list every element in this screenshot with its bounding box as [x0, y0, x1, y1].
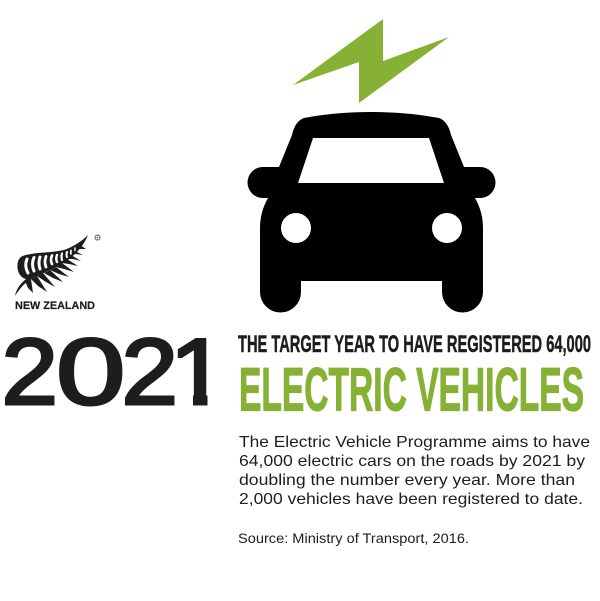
big year: 1 — [170, 319, 227, 424]
big year: 2 — [2, 318, 58, 424]
body text: 2,000 vehicles have been registered to date. — [239, 491, 583, 508]
text: NEW ZEALAND: NEW ZEALAND — [15, 300, 95, 312]
body text: doubling the number every year. More than — [239, 472, 575, 489]
icon: electric car — [247, 112, 496, 312]
logo: New Zealand fern — [15, 235, 100, 312]
icon: lightning bolt — [293, 19, 449, 103]
body text — [239, 434, 590, 508]
body text: 64,000 electric cars on the roads by 2021 by — [239, 453, 585, 470]
big year: 2 — [122, 318, 178, 424]
source note: Source: Ministry of Transport, 2016. — [238, 531, 469, 546]
big year — [5, 337, 208, 406]
big year: 0 — [56, 319, 125, 424]
icon: silver fern — [15, 235, 88, 296]
registered mark — [95, 235, 100, 240]
body text: The Electric Vehicle Programme aims to have — [239, 434, 590, 451]
